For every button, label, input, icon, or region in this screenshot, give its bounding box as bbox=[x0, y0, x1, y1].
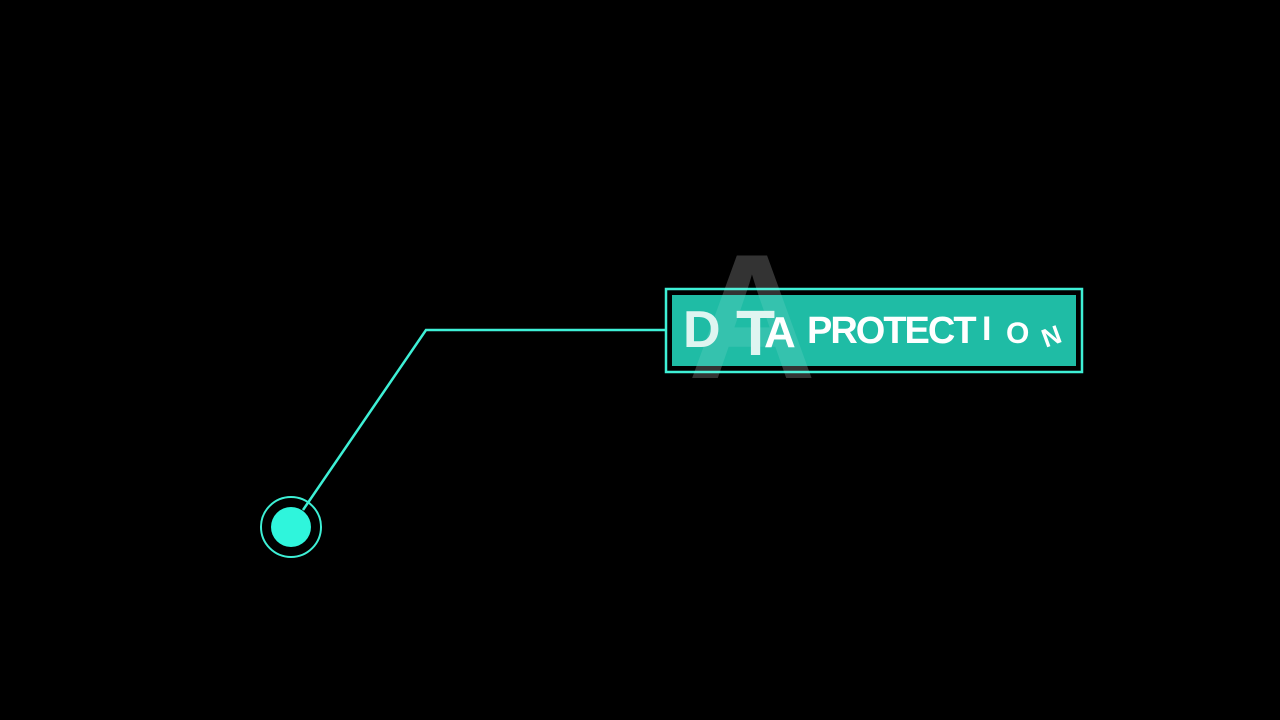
title label box bbox=[666, 217, 1082, 416]
title text: A bbox=[764, 308, 796, 357]
title text: PROTECT bbox=[807, 310, 976, 352]
ghost A overlay inside box: A bbox=[688, 217, 816, 416]
icon: node circle bbox=[261, 497, 321, 557]
title text: N bbox=[1037, 319, 1065, 354]
title text: I bbox=[982, 310, 991, 348]
title text: O bbox=[1006, 317, 1029, 350]
connector line bbox=[303, 330, 666, 510]
title text bbox=[683, 297, 1065, 369]
ghost letter A: A bbox=[688, 217, 816, 416]
title text: D bbox=[683, 301, 721, 359]
title text: T bbox=[736, 297, 775, 369]
